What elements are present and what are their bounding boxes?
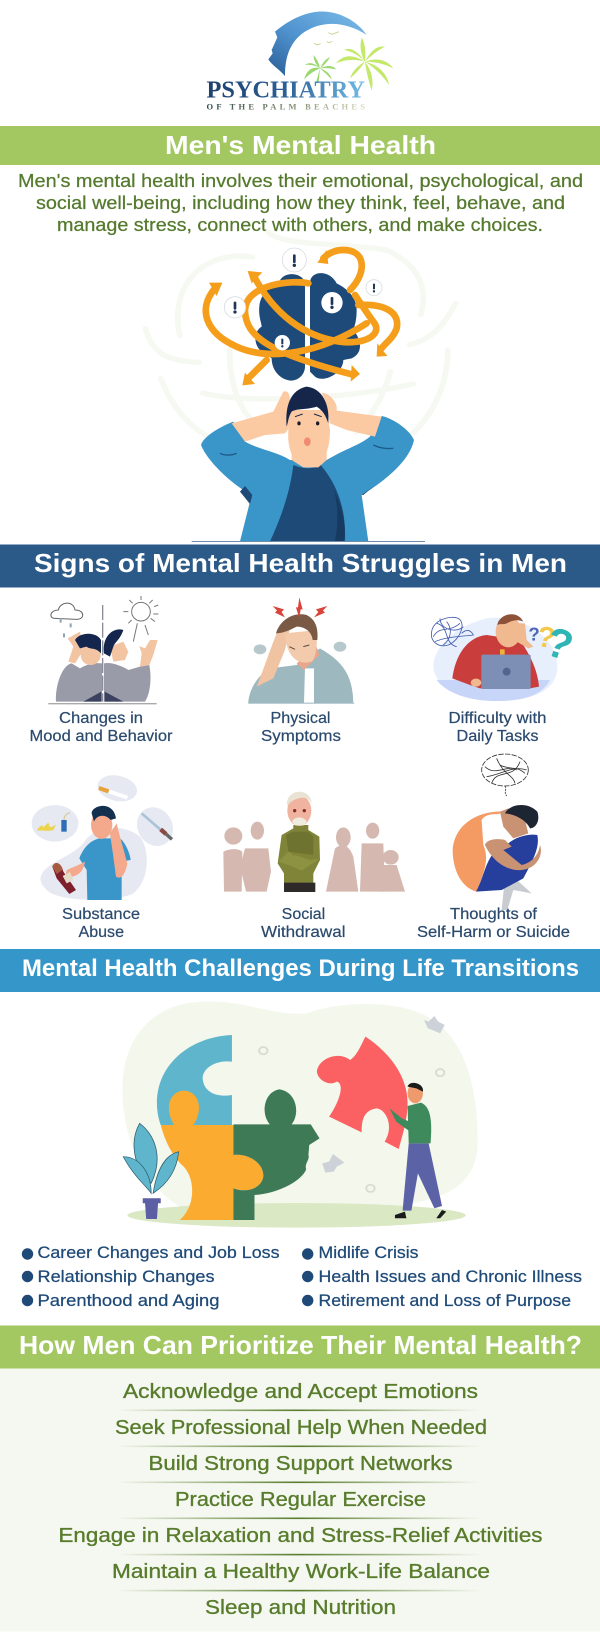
heading band: How Men Can Prioritize Their Mental Health?: How Men Can Prioritize Their Mental Health?	[19, 1330, 582, 1360]
teal puzzle piece	[157, 1035, 232, 1125]
faint background arrows	[145, 232, 455, 443]
illustration: stressed man with tangled brain	[145, 232, 455, 542]
panel: ways to prioritize mental health: Build Strong Support Networks	[148, 1452, 452, 1475]
logo: Psychiatry of the Palm Beaches	[206, 11, 393, 112]
sign: Difficulty with Daily Tasks: ?	[534, 620, 558, 656]
sign: Physical Symptoms	[248, 597, 354, 745]
bullet list: life transitions: Career Changes and Job Loss	[38, 1244, 280, 1262]
bullet list: life transitions: Midlife Crisis	[318, 1244, 418, 1262]
illustration: puzzle head and man	[122, 1002, 478, 1228]
panel: ways to prioritize mental health: Seek Professional Help When Needed	[115, 1416, 487, 1439]
heading band: Men's Mental Health: Men's Mental Health	[165, 130, 436, 160]
red puzzle piece	[317, 1037, 408, 1149]
sign: Difficulty with Daily Tasks	[431, 614, 579, 745]
panel: ways to prioritize mental health: Maintain a Healthy Work-Life Balance	[112, 1560, 490, 1583]
logo: Psychiatry of the Palm Beaches: PSYCHIATRY	[206, 78, 365, 104]
intro paragraph: Men's mental health involves their emotional, psychological, and	[18, 171, 583, 191]
sign: Social Withdrawal	[223, 792, 405, 941]
sign: Changes in Mood and Behavior: Mood and Behavior	[30, 728, 172, 745]
intro paragraph: manage stress, connect with others, and make choices.	[57, 215, 543, 235]
small puzzle pieces and rings	[322, 1016, 445, 1173]
sign: Physical Symptoms: Physical	[270, 710, 330, 727]
heading band: Signs of Mental Health Struggles in Men: Signs of Mental Health Struggles in Men	[34, 548, 567, 578]
panel: ways to prioritize mental health: Acknowledge and Accept Emotions	[123, 1380, 478, 1403]
green puzzle piece	[233, 1089, 320, 1220]
bullet list: life transitions: Relationship Changes	[38, 1268, 214, 1286]
sign: Difficulty with Daily Tasks: ?	[540, 617, 579, 670]
walking man	[403, 1143, 442, 1211]
sign: Social Withdrawal: Withdrawal	[261, 924, 346, 941]
sign: Changes in Mood and Behavior	[30, 596, 172, 745]
intro paragraph: social well-being, including how they think, feel, behave, and	[36, 193, 565, 213]
bullet list: life transitions	[22, 1244, 582, 1310]
sign: Thoughts of Self-Harm or Suicide: Self-Harm or Suicide	[417, 924, 570, 941]
sign: Physical Symptoms: Symptoms	[261, 728, 341, 745]
sign: Changes in Mood and Behavior: Changes in	[59, 710, 143, 727]
heading band: Men's Mental Health	[0, 126, 600, 165]
panel: ways to prioritize mental health: Engage in Relaxation and Stress-Relief Activities	[58, 1524, 542, 1547]
brain with arrows	[206, 248, 397, 385]
heading band: Mental Health Challenges During Life Transitions: Mental Health Challenges During Life Transitions	[22, 955, 579, 982]
panel: ways to prioritize mental health	[0, 1368, 600, 1632]
bullet list: life transitions: Parenthood and Aging	[38, 1292, 219, 1310]
bullet list: life transitions: Health Issues and Chronic Illness	[318, 1268, 582, 1286]
panel: ways to prioritize mental health: Practice Regular Exercise	[175, 1488, 426, 1511]
plant	[123, 1123, 179, 1193]
sign: Thoughts of Self-Harm or Suicide	[417, 754, 570, 941]
intro paragraph	[18, 171, 583, 235]
sign: Difficulty with Daily Tasks: ?	[528, 624, 540, 645]
sign: Difficulty with Daily Tasks: Daily Tasks	[456, 728, 539, 745]
man holding his head	[192, 387, 425, 542]
heading band: Signs of Mental Health Struggles in Men	[0, 544, 600, 588]
heading band: Mental Health Challenges During Life Transitions	[0, 949, 600, 992]
logo: Psychiatry of the Palm Beaches: OF THE PALM BEACHES	[206, 102, 365, 112]
sign: Social Withdrawal: Social	[282, 906, 325, 923]
sign: Difficulty with Daily Tasks: Difficulty with	[448, 710, 546, 727]
sign: Substance Abuse: Substance	[62, 906, 140, 923]
heading band: How Men Can Prioritize Their Mental Health?	[0, 1326, 600, 1368]
sign: Substance Abuse: Abuse	[78, 924, 124, 941]
sign: Substance Abuse	[32, 772, 180, 941]
panel: ways to prioritize mental health: Sleep and Nutrition	[205, 1596, 396, 1619]
sign: Thoughts of Self-Harm or Suicide: Thoughts of	[450, 906, 538, 923]
orange puzzle piece	[161, 1091, 263, 1220]
bullet list: life transitions: Retirement and Loss of Purpose	[318, 1292, 571, 1310]
